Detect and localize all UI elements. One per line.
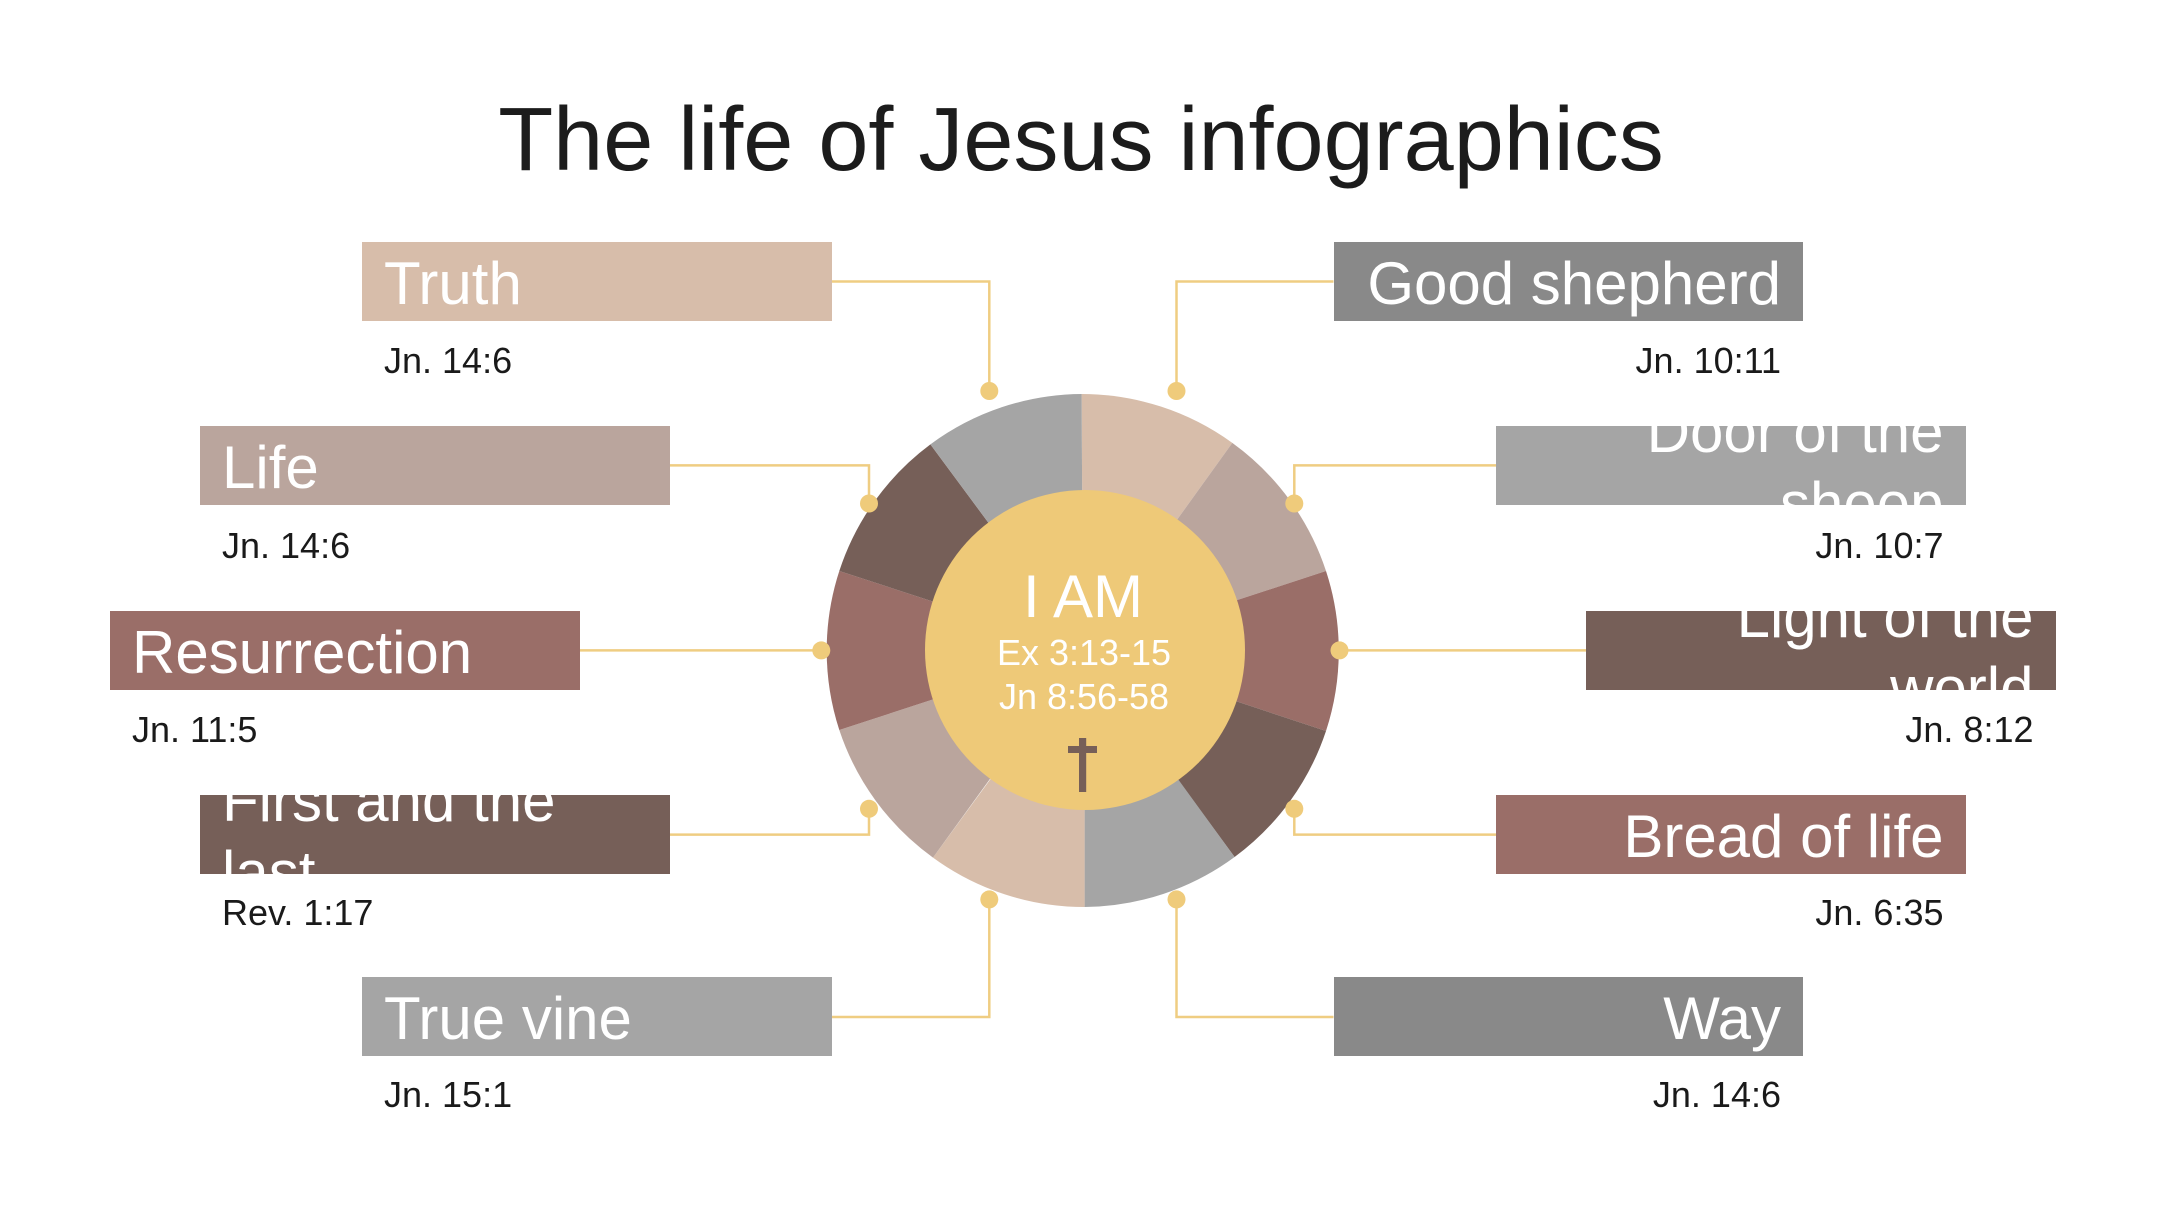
center heading: I AM — [1023, 563, 1143, 630]
reference: Bread of life: Jn. 6:35 — [1815, 892, 1944, 933]
label: True vine: True vine — [384, 984, 632, 1052]
reference: Life: Jn. 14:6 — [222, 525, 350, 566]
center verse 1: Ex 3:13-15 — [997, 632, 1171, 673]
icon: cross — [1068, 738, 1097, 792]
label: Life — [200, 426, 670, 505]
label: Light of the world — [1586, 611, 2056, 690]
reference: Door of the sheep: Jn. 10:7 — [1815, 525, 1944, 566]
label: Bread of life: Bread of life — [1623, 802, 1944, 870]
label: Resurrection: Resurrection — [132, 618, 472, 686]
reference: Good shepherd: Jn. 10:11 — [1636, 340, 1781, 381]
reference: True vine: Jn. 15:1 — [384, 1074, 512, 1115]
label: Way — [1334, 977, 1803, 1056]
reference: Truth: Jn. 14:6 — [384, 340, 512, 381]
center verse 2: Jn 8:56-58 — [999, 676, 1169, 717]
label: Life: Life — [222, 434, 319, 500]
label: Truth: Truth — [384, 250, 522, 316]
label: True vine — [362, 977, 832, 1056]
label: Truth — [362, 242, 832, 321]
label: Bread of life — [1496, 795, 1966, 874]
title: The life of Jesus infographics — [498, 90, 1664, 190]
reference: Light of the world: Jn. 8:12 — [1905, 709, 2034, 750]
label: Way: Way — [1663, 984, 1781, 1052]
label: First and the last — [200, 795, 670, 874]
reference: Resurrection: Jn. 11:5 — [132, 709, 257, 750]
reference: Way: Jn. 14:6 — [1653, 1074, 1781, 1115]
label: Door of the sheep — [1496, 426, 1966, 505]
reference: First and the last: Rev. 1:17 — [222, 892, 373, 933]
label: Good shepherd: Good shepherd — [1367, 250, 1781, 316]
label: Resurrection — [110, 611, 580, 690]
